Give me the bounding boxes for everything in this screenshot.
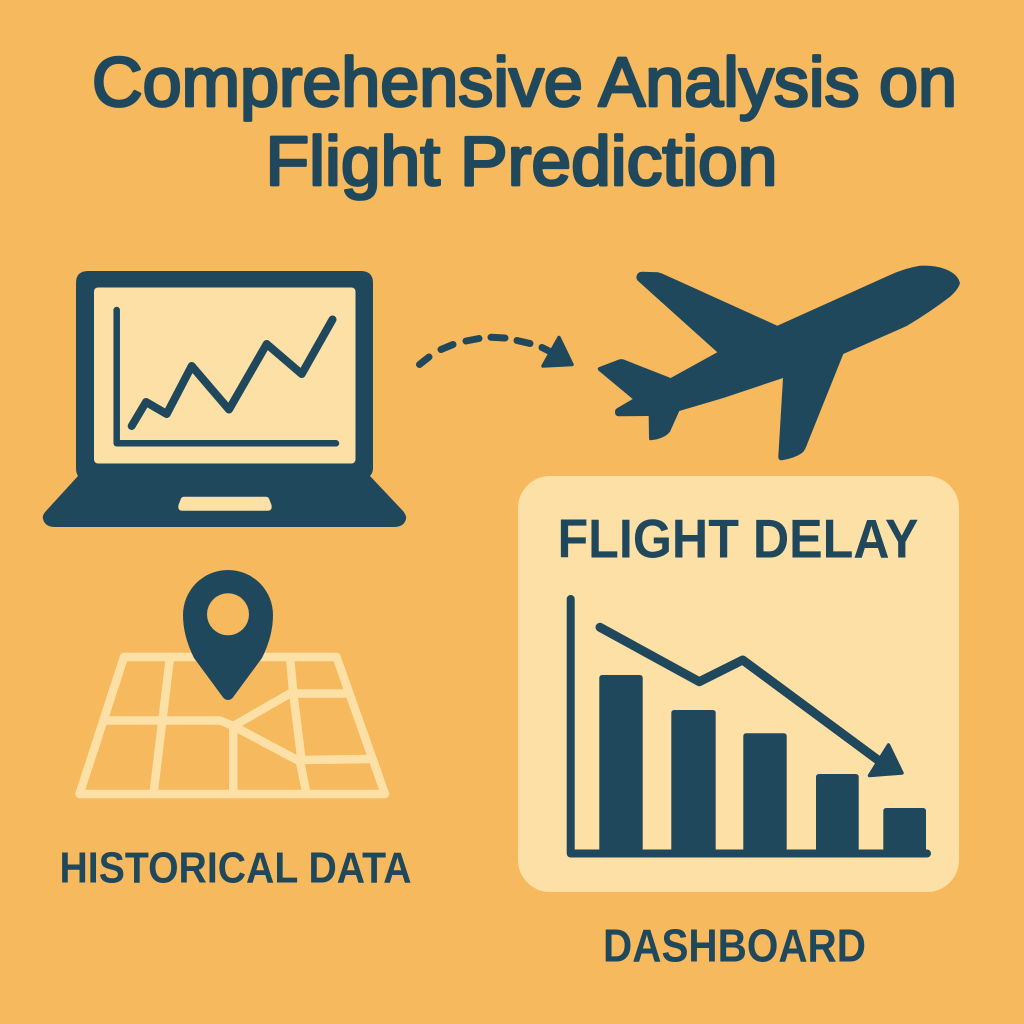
arrow: dashed curve [420, 337, 572, 366]
location pin [183, 570, 273, 700]
icon: laptop with line chart [43, 271, 406, 527]
title: Flight Prediction [266, 122, 778, 200]
chart axes [571, 599, 927, 854]
title [92, 43, 957, 200]
icon: map with location pin [80, 570, 385, 794]
panel: flight delay dashboard [518, 476, 959, 892]
label: dashboard: DASHBOARD [603, 920, 866, 972]
bar chart [599, 675, 926, 854]
map grid [80, 657, 385, 794]
label: historical data: HISTORICAL DATA [60, 844, 412, 892]
trend arrow [600, 627, 902, 776]
heading: flight delay: FLIGHT DELAY [558, 508, 918, 570]
icon: airplane [598, 266, 960, 460]
title: Comprehensive Analysis on [92, 43, 957, 121]
